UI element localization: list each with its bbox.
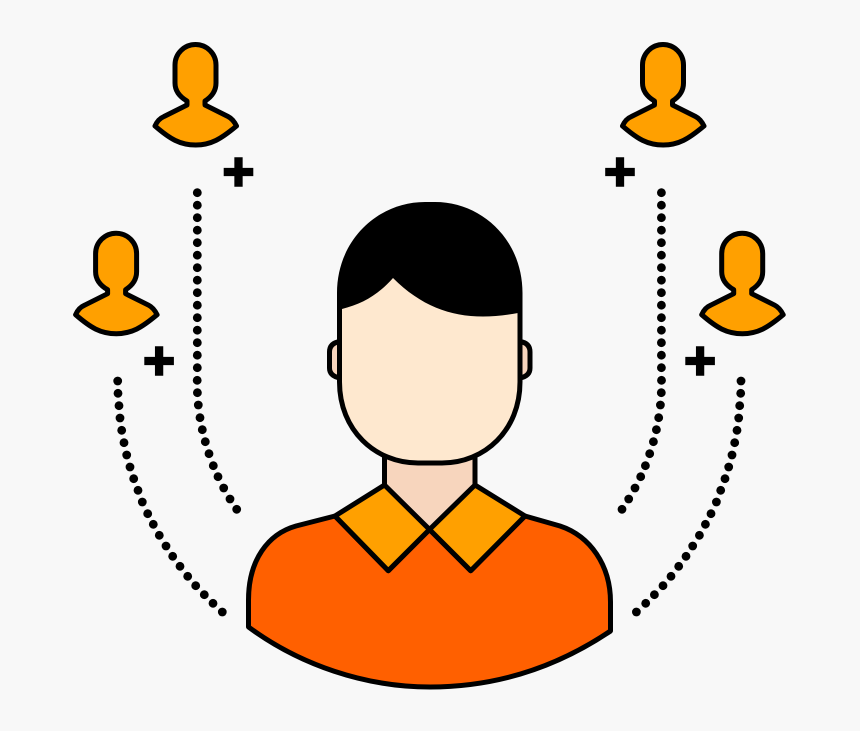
icon: contact top left <box>155 44 236 145</box>
dotted arrow: top left <box>193 188 241 514</box>
face <box>340 265 520 463</box>
left collar <box>335 485 430 571</box>
icon: plus middle right <box>685 346 715 376</box>
right ear <box>520 342 530 378</box>
shirt <box>248 516 610 687</box>
left ear <box>330 342 340 378</box>
icon: plus middle left <box>144 346 174 376</box>
icon: contact middle right <box>702 233 783 334</box>
neck <box>384 445 475 530</box>
right collar <box>430 485 525 571</box>
icon: contact middle left <box>76 233 157 334</box>
dotted arrow: top right <box>618 188 666 514</box>
icon: plus top left <box>224 157 253 187</box>
icon: contact top right <box>622 44 704 145</box>
dotted arrow: lower left <box>113 377 227 616</box>
dotted arrow: lower right <box>632 377 745 616</box>
icon: plus top right <box>605 157 635 187</box>
icon: main person <box>248 202 610 687</box>
hair <box>337 202 522 317</box>
